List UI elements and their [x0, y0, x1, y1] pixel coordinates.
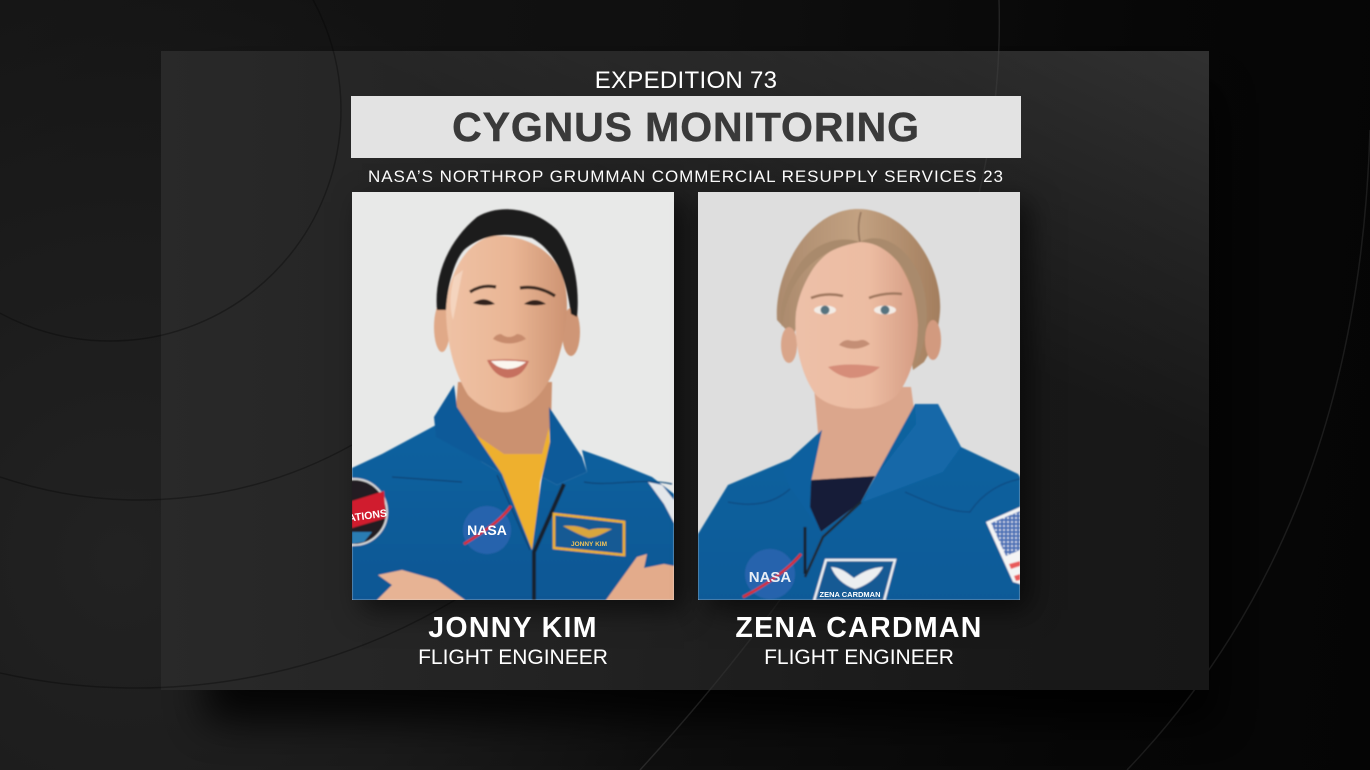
eyes [814, 306, 836, 314]
name tag [814, 560, 895, 601]
portrait: Jonny Kim [352, 192, 674, 600]
role: Zena Cardman: FLIGHT ENGINEER [764, 646, 954, 669]
name: Jonny Kim: JONNY KIM [428, 612, 598, 644]
nameplate text: ZENA CARDMAN [820, 590, 880, 599]
hairline strands [781, 238, 927, 364]
subtitle: NASA’S NORTHROP GRUMMAN COMMERCIAL RESUPPLY SERVICES 23 [368, 167, 1004, 186]
flag patch [986, 507, 1020, 584]
portrait: Zena Cardman [698, 192, 1020, 600]
title banner [351, 96, 1021, 158]
name tag [554, 514, 624, 555]
nose [839, 340, 870, 349]
neck [806, 387, 916, 484]
ears [434, 302, 450, 352]
eyebrows [470, 286, 555, 296]
NASA text: NASA [749, 569, 791, 586]
right shoulder patch [648, 482, 674, 523]
mouth [487, 359, 529, 378]
hair back [777, 209, 940, 370]
neck [456, 382, 552, 464]
flight suit [352, 425, 674, 600]
mouth [828, 364, 880, 378]
title banner: CYGNUS MONITORING [452, 104, 920, 150]
face [446, 236, 567, 412]
yellow shirt [476, 427, 550, 550]
arms [377, 570, 465, 600]
role: Jonny Kim: FLIGHT ENGINEER [418, 646, 608, 669]
NASA text: NASA [467, 522, 507, 538]
ears [781, 327, 797, 363]
nose [493, 334, 526, 344]
NASA meatball [745, 549, 795, 599]
flight suit [698, 404, 1020, 600]
face [795, 242, 918, 409]
panel: background card [161, 51, 1209, 690]
name: Zena Cardman: ZENA CARDMAN [735, 612, 983, 644]
hair [437, 209, 578, 317]
shoulder patch [321, 479, 387, 545]
eyebrows [811, 294, 902, 298]
NASA meatball [463, 506, 511, 554]
navy undershirt [808, 476, 875, 532]
zipper [805, 502, 861, 577]
heading: expedition: EXPEDITION 73 [595, 67, 777, 94]
nameplate text: JONNY KIM [571, 541, 607, 548]
eyes [473, 299, 546, 306]
